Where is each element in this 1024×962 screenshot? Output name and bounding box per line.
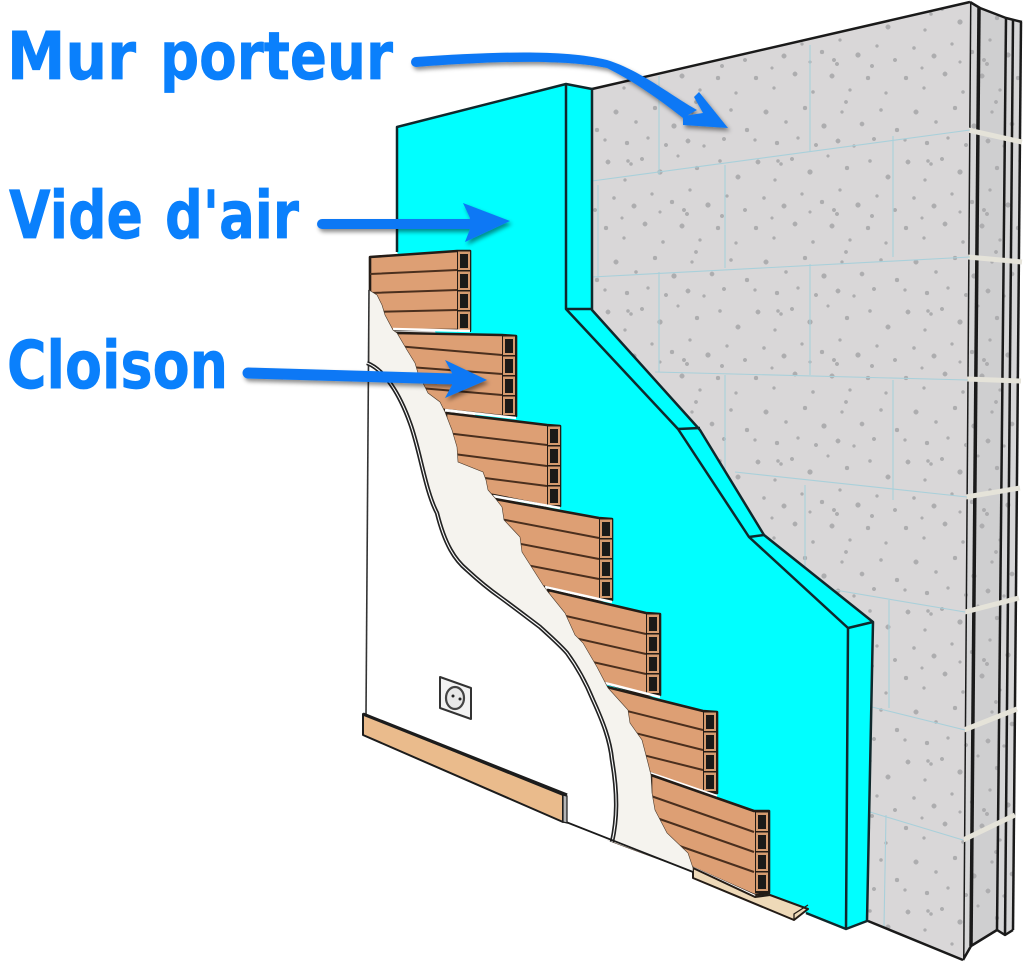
partition: hollow bricks [370,250,769,896]
label: Vide d'air: Vide [9,177,143,254]
brick course 7 [651,775,769,896]
lower floor strip [693,868,808,920]
brick course 4 [495,499,613,602]
arrow: to load-bearing wall [411,52,728,128]
brick course 2 [396,333,516,418]
label: Cloison: Cloison [7,327,228,404]
label: Mur porteur: Mur [7,18,136,95]
wall side edges [963,2,1022,960]
label: Vide d'air [9,177,299,254]
arrow: to air gap [322,203,510,242]
brick course 1 [370,250,471,332]
arrow: to partition [248,360,487,398]
label: Vide d'air: d'air [165,177,299,254]
baseboard [363,714,567,823]
plaster layer [369,290,693,872]
air gap: cyan layer [397,84,873,929]
plasterboard panel [366,290,693,872]
brick course 6 [607,687,717,796]
label: Mur porteur [7,18,393,95]
label: Mur porteur: porteur [160,18,393,95]
brick course 3 [446,413,561,508]
wall face [592,2,970,960]
load-bearing wall [592,2,1022,960]
brick course 5 [548,590,660,697]
icon: electrical socket [440,677,471,719]
